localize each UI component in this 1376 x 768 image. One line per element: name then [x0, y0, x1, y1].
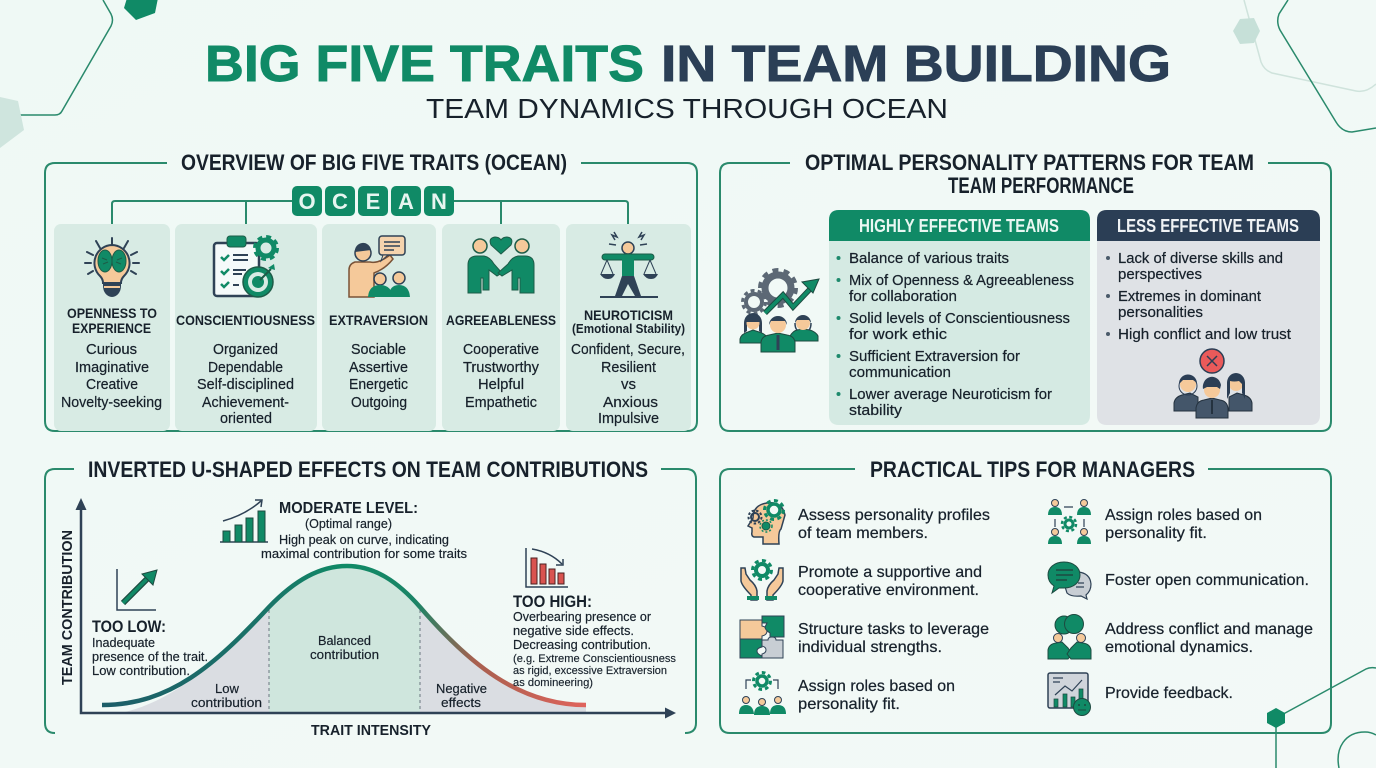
tip: structure tasks: individual strengths. [798, 639, 942, 656]
x axis label: TRAIT INTENSITY [311, 723, 431, 739]
tip: structure tasks [740, 616, 989, 658]
card: conscientiousness: Organized [213, 341, 278, 358]
callout: moderate level: (Optimal range) [305, 517, 392, 531]
card: openness: OPENNESS TO [67, 305, 157, 321]
card: neuroticism: NEUROTICISM [584, 307, 673, 323]
curve line [102, 566, 586, 705]
card: highly effective teams: for collaboration [849, 288, 957, 305]
callout: moderate level: High peak on curve, indicating [279, 533, 449, 547]
title [205, 35, 1171, 92]
OCEAN letter tiles: E [366, 189, 380, 214]
card: extraversion: Energetic [349, 376, 408, 393]
card: agreeableness: Cooperative [463, 341, 539, 358]
area labels: contribution [310, 648, 379, 662]
card: less effective teams [1097, 210, 1320, 425]
OCEAN letter tiles: C [332, 189, 348, 214]
icon: speaker with audience [349, 236, 410, 297]
card: neuroticism [566, 224, 691, 431]
decoration: bottom-right network lines [1267, 668, 1376, 768]
tip: promote supportive environment: Promote a supportive and [798, 564, 982, 581]
OCEAN letter tiles [292, 186, 454, 216]
OCEAN letter tiles: A [398, 189, 414, 214]
card: highly effective teams: Balance of various traits [849, 250, 1009, 267]
tip: assign roles (left): personality fit. [798, 696, 900, 713]
card: extraversion: Outgoing [351, 394, 407, 411]
icon: rising arrow chart [117, 569, 157, 610]
callout: too high: as domineering) [513, 677, 593, 689]
callout: too low: presence of the trait. [92, 650, 208, 664]
card: conscientiousness: Dependable [208, 359, 283, 376]
card: less effective teams: perspectives [1118, 266, 1202, 283]
icon: rising bars [220, 500, 268, 542]
callout: too high: Decreasing contribution. [513, 638, 651, 652]
callout: too low: Inadequate [92, 636, 155, 650]
icon: light bulb with brain [85, 238, 139, 297]
heading: optimal patterns [805, 150, 1254, 198]
tip: address conflict [1048, 614, 1313, 659]
card: agreeableness: Empathetic [465, 394, 537, 411]
area labels: Negative [436, 682, 487, 696]
icon: two people and speech bubbles [1048, 614, 1091, 659]
area labels: contribution [191, 696, 262, 710]
card: openness [54, 224, 170, 431]
card: less effective teams: High conflict and low trust [1118, 326, 1292, 343]
OCEAN letter tiles: N [431, 189, 447, 214]
card: highly effective teams [829, 210, 1090, 425]
icon: figure balancing scales [600, 232, 658, 297]
card: conscientiousness: Self-disciplined [197, 376, 294, 393]
OCEAN letter tiles: O [298, 189, 316, 214]
card: openness: Curious [86, 341, 137, 358]
card: agreeableness: Trustworthy [463, 359, 539, 376]
panel: overview of Big Five traits [45, 150, 697, 431]
tip: promote supportive environment [741, 560, 982, 600]
decoration: top-right network lines [1233, 0, 1376, 132]
area labels: effects [441, 696, 481, 710]
tip: assess personality profiles [748, 500, 990, 544]
card: neuroticism: Impulsive [598, 410, 659, 427]
card: conscientiousness: Achievement- [202, 394, 289, 411]
area labels: Low [215, 682, 240, 696]
tip: foster open communication [1048, 562, 1309, 599]
tip: assign roles (right): personality fit. [1105, 525, 1207, 542]
shaded area: negative effects [420, 607, 586, 712]
card: extraversion: EXTRAVERSION [329, 312, 428, 328]
card: highly effective teams: communication [849, 364, 951, 381]
card: highly effective teams: Solid levels of Conscientiousness [849, 310, 1070, 327]
card: conscientiousness: CONSCIENTIOUSNESS [176, 312, 315, 328]
tip: provide feedback: Provide feedback. [1105, 685, 1233, 702]
heading: overview: OVERVIEW OF BIG FIVE TRAITS (OCEAN) [181, 150, 567, 175]
card: openness: Novelty-seeking [61, 394, 162, 411]
card: neuroticism: Confident, Secure, [571, 341, 685, 358]
area labels [191, 634, 487, 710]
panel: inverted U-shaped effects [45, 457, 696, 739]
chart: inverted U curve [60, 498, 676, 739]
axes [76, 498, 676, 718]
icon: chart screen with face [1048, 673, 1090, 716]
tip: assign roles (left): Assign roles based on [798, 678, 955, 695]
title: BIG FIVE TRAITS [205, 35, 644, 92]
tip: structure tasks: Structure tasks to leverage [798, 621, 989, 638]
tip: assign roles (left) [739, 672, 955, 715]
card: less effective teams: LESS EFFECTIVE TEAMS [1117, 216, 1299, 236]
card: extraversion [322, 224, 436, 431]
card: openness: Creative [86, 376, 138, 393]
subtitle: TEAM DYNAMICS THROUGH OCEAN [426, 93, 948, 124]
tip: assign roles (right) [1048, 500, 1262, 544]
icon: clipboard, gear and target [214, 236, 278, 297]
callout: too high [513, 548, 676, 689]
shaded area: balanced contribution [269, 566, 420, 712]
card: highly effective teams: stability [849, 402, 903, 419]
callout: too high: as rigid, excessive Extraversion [513, 665, 667, 677]
card: openness: EXPERIENCE [72, 320, 151, 336]
card: conscientiousness [175, 224, 317, 431]
icon: head with gears [748, 500, 785, 544]
card: less effective teams: personalities [1118, 304, 1203, 321]
tip: promote supportive environment: cooperative environment. [798, 582, 979, 599]
icon: red cross over unhappy team [1174, 349, 1252, 418]
callout: moderate level: MODERATE LEVEL: [279, 500, 418, 517]
callout: moderate level [220, 500, 467, 561]
tip: address conflict: emotional dynamics. [1105, 639, 1253, 656]
card: extraversion: Sociable [351, 341, 406, 358]
card: neuroticism: Anxious [603, 394, 658, 411]
card: agreeableness [442, 224, 560, 431]
icon: speech bubbles [1048, 562, 1091, 599]
panel: optimal personality patterns [720, 150, 1331, 431]
heading: practical tips: PRACTICAL TIPS FOR MANAGERS [870, 457, 1195, 482]
heading: optimal patterns: OPTIMAL PERSONALITY PATTERNS FOR TEAM [805, 150, 1254, 175]
callout: too high: Overbearing presence or [513, 610, 651, 624]
icon: falling bars [526, 548, 568, 587]
callout: too high: negative side effects. [513, 624, 634, 638]
y axis label: TEAM CONTRIBUTION [60, 530, 76, 685]
card: openness: Imaginative [75, 359, 149, 376]
icon: two people shaking hands with heart [468, 237, 534, 293]
card: neuroticism: Resilient [601, 359, 657, 376]
card: less effective teams: Extremes in dominant [1118, 288, 1262, 305]
OCEAN connector lines [112, 201, 628, 224]
area labels: Balanced [318, 634, 371, 648]
card: highly effective teams: Lower average Neuroticism for [849, 386, 1052, 403]
tip: foster open communication: Foster open communication. [1105, 572, 1309, 589]
callout: too low: TOO LOW: [92, 617, 166, 636]
icon: jigsaw puzzle [740, 616, 784, 658]
icon: four people linked by gear [1048, 500, 1091, 544]
callout: too high: TOO HIGH: [513, 592, 592, 611]
title: IN TEAM BUILDING [661, 35, 1171, 92]
icon: gear above three people [739, 672, 786, 715]
icon: hands holding gear [741, 560, 783, 600]
callout: too low: Low contribution. [92, 664, 190, 678]
card: less effective teams: Lack of diverse skills and [1118, 250, 1283, 267]
shaded area: low contribution [125, 607, 269, 712]
tip: provide feedback [1048, 673, 1233, 716]
heading: inverted U: INVERTED U-SHAPED EFFECTS ON TEAM CONTRIBUTIONS [88, 457, 648, 482]
panel: practical tips for managers [720, 457, 1331, 733]
tip: assess personality profiles: of team members. [798, 525, 928, 542]
callout: moderate level: maximal contribution for some traits [261, 547, 467, 561]
card: agreeableness: Helpful [478, 376, 524, 393]
heading: optimal patterns: TEAM PERFORMANCE [948, 173, 1134, 198]
card: highly effective teams: for work ethic [849, 326, 948, 343]
card: agreeableness: AGREEABLENESS [446, 312, 556, 328]
card: neuroticism: vs [621, 376, 636, 393]
tip: address conflict: Address conflict and manage [1105, 621, 1313, 638]
card: highly effective teams: HIGHLY EFFECTIVE TEAMS [859, 216, 1059, 236]
card: conscientiousness: oriented [220, 410, 272, 427]
callout: too high: (e.g. Extreme Conscientiousness [513, 653, 676, 665]
callout: too low [92, 569, 208, 678]
card: neuroticism: (Emotional Stability) [572, 322, 685, 336]
tip: assign roles (right): Assign roles based on [1105, 507, 1262, 524]
card: extraversion: Assertive [349, 359, 408, 376]
icon: team with gears and rising arrow [740, 270, 819, 352]
card: highly effective teams: Sufficient Extraversion for [849, 348, 1020, 365]
card: highly effective teams: Mix of Openness & Agreeableness [849, 272, 1074, 289]
tip: assess personality profiles: Assess personality profiles [798, 507, 990, 524]
decoration: top-left network lines [0, 0, 158, 148]
